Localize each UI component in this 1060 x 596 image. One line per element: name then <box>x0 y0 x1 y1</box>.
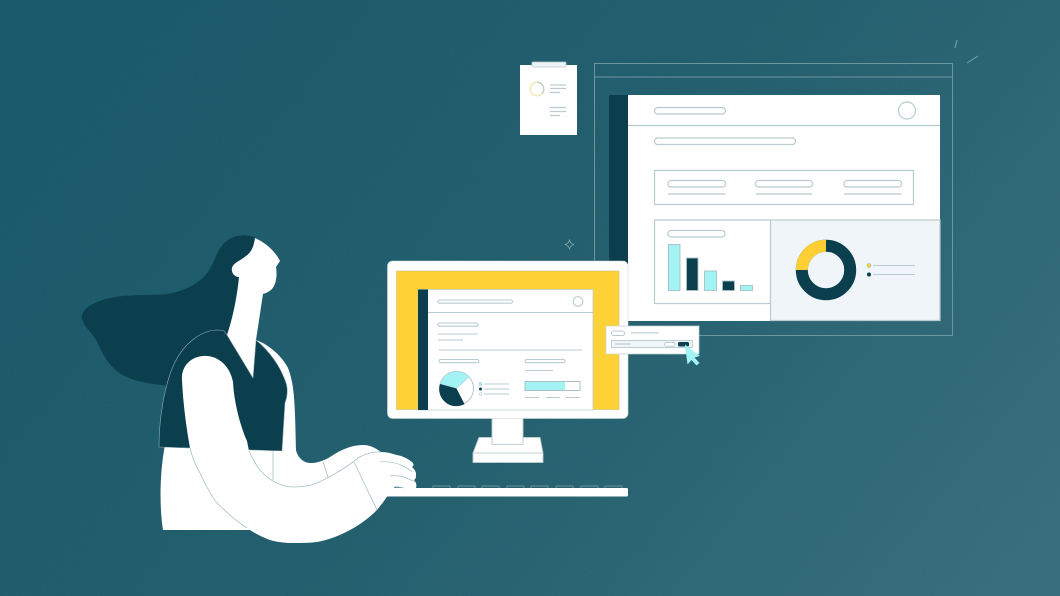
neck and face <box>227 238 280 378</box>
hair <box>82 235 262 386</box>
donut chart panel <box>770 220 940 320</box>
pie legend <box>479 382 509 396</box>
torso <box>161 340 296 530</box>
monitor stand <box>473 418 543 462</box>
rear hand and forearm <box>247 440 382 495</box>
stats row <box>654 170 914 204</box>
large dashboard sidebar <box>609 95 628 321</box>
cursor arrow <box>685 344 700 366</box>
vest <box>159 330 287 451</box>
large dashboard window outline <box>594 64 952 336</box>
popup dialog <box>606 326 700 366</box>
sparkle icon <box>565 240 574 250</box>
front arm and hand <box>182 356 416 543</box>
large dashboard surface <box>628 95 940 321</box>
monitor <box>388 261 628 462</box>
bar chart <box>654 220 770 304</box>
large dashboard header <box>628 102 940 144</box>
monitor wallpaper <box>396 271 619 410</box>
keyboard <box>380 486 628 496</box>
clipboard <box>520 62 577 135</box>
monitor frame <box>388 261 628 418</box>
large dashboard panel <box>609 95 940 321</box>
pie chart <box>439 371 474 406</box>
decorative spark lines <box>955 40 978 63</box>
monitor app window <box>418 290 593 410</box>
progress bar <box>525 382 580 398</box>
